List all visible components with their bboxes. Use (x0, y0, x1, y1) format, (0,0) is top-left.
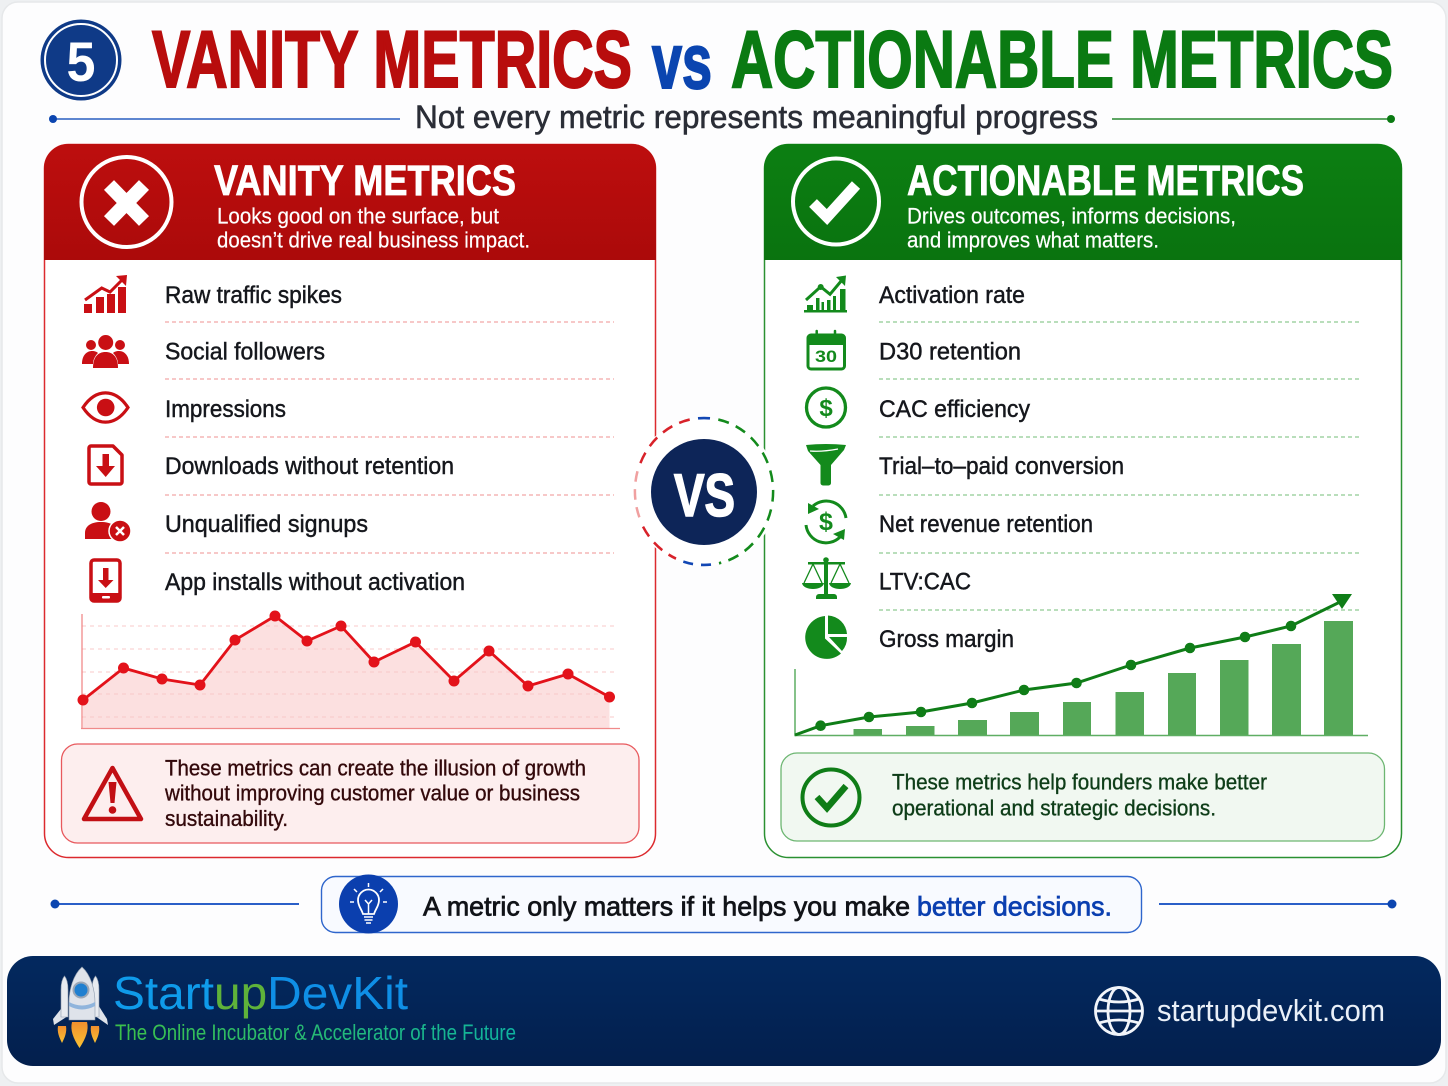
label: Gross margin (879, 626, 1014, 653)
website: startupdevkit.com (1157, 993, 1385, 1028)
header description: vanity: doesn’t drive real business impact. (217, 228, 530, 252)
header description: actionable (907, 204, 1236, 252)
subtitle with rules (49, 99, 1395, 135)
row: raw traffic spikes (84, 275, 342, 313)
callout text: sustainability. (165, 806, 288, 831)
header description: vanity (217, 204, 530, 252)
icon: calendar 30: 30 (815, 347, 837, 366)
header: title row (40, 15, 1393, 105)
heading: vanity metrics: VANITY METRICS (214, 157, 516, 205)
list: vanity metrics (82, 275, 614, 601)
subtitle with rules: Not every metric represents meaningful progress (415, 99, 1098, 135)
header description: actionable: Drives outcomes, informs decisions, (907, 204, 1236, 228)
row: net revenue retention (806, 501, 1093, 543)
row: d30 retention (808, 331, 1021, 369)
callout text: without improving customer value or business (164, 780, 580, 806)
icon: document download (89, 446, 122, 484)
badge: number 5 (40, 20, 122, 100)
takeaway text: A metric only matters if it helps you make (423, 892, 910, 922)
label: LTV:CAC (879, 568, 971, 596)
title: vs: vs (652, 17, 712, 105)
row: activation rate (804, 276, 1025, 312)
icon: people (82, 335, 129, 368)
label: Downloads without retention (165, 453, 454, 480)
callout text: These metrics help founders make better (892, 770, 1267, 794)
logo: rocket (53, 967, 108, 1048)
panel: vanity metrics (44, 144, 656, 858)
row: app installs without activation (91, 560, 465, 601)
icon: cycling dollar (806, 501, 846, 543)
list: actionable metrics (802, 276, 1359, 659)
icon: check circle (802, 770, 860, 826)
label: CAC efficiency (879, 396, 1030, 423)
icon: x in circle (82, 157, 172, 247)
row: unqualified signups (85, 502, 368, 542)
chart: rising bars and line (795, 594, 1368, 736)
icon: dollar circle (806, 388, 846, 427)
row: downloads without retention (89, 446, 454, 484)
badge: number 5: 5 (66, 30, 96, 93)
row: impressions (83, 393, 286, 423)
icon: calendar 30 (808, 331, 844, 369)
label: D30 retention (879, 338, 1021, 366)
callout text: operational and strategic decisions. (892, 796, 1216, 820)
callout text (164, 756, 586, 831)
label: Trial–to–paid conversion (879, 453, 1124, 480)
takeaway text: better decisions. (917, 892, 1112, 922)
header description: vanity: Looks good on the surface, but (217, 204, 499, 228)
vs badge: VS (674, 462, 735, 529)
label: Raw traffic spikes (165, 282, 342, 309)
icon: dollar circle: $ (819, 395, 833, 422)
tagline: The Online Incubator & Accelerator of the Future (115, 1020, 516, 1045)
icon: user with x (85, 502, 131, 542)
takeaway banner (50, 874, 1396, 934)
callout text: These metrics can create the illusion of growth (165, 756, 586, 780)
panel: actionable metrics (764, 144, 1402, 858)
callout: illusion of growth (62, 744, 639, 843)
row: ltv:cac (802, 557, 971, 599)
icon: globe (1096, 988, 1142, 1034)
icon: funnel (806, 444, 846, 486)
label: Activation rate (879, 282, 1025, 309)
panel header: vanity (44, 144, 656, 260)
icon: balance scale (802, 557, 851, 599)
row: gross margin (805, 616, 1014, 659)
icon: pie chart (805, 616, 847, 659)
label: Net revenue retention (879, 511, 1093, 538)
panel header: actionable (764, 144, 1402, 260)
callout text (892, 770, 1267, 820)
vs badge (630, 418, 778, 566)
label: App installs without activation (165, 569, 465, 596)
icon: lightbulb (339, 874, 398, 934)
row: cac efficiency (806, 388, 1030, 427)
icon: warning triangle (84, 768, 141, 819)
icon: growth chart (804, 276, 847, 312)
icon: eye (83, 393, 128, 422)
chart: fluctuating line (78, 610, 620, 728)
label: Social followers (165, 338, 325, 366)
icon: cycling dollar: $ (819, 508, 833, 536)
title: vanity metrics: VANITY METRICS (152, 15, 632, 105)
logo wordmark: StartupDevKit (113, 967, 408, 1019)
label: Unqualified signups (165, 511, 368, 538)
label: Impressions (165, 396, 286, 423)
callout: better decisions (781, 753, 1384, 841)
row: social followers (82, 335, 325, 368)
row: trial-to-paid conversion (806, 444, 1124, 486)
icon: rising bars (84, 275, 127, 313)
footer bar (7, 956, 1441, 1066)
icon: tablet download (91, 560, 120, 601)
heading: actionable metrics: ACTIONABLE METRICS (907, 157, 1304, 205)
header description: actionable: and improves what matters. (907, 228, 1159, 252)
icon: check in circle (793, 158, 879, 244)
